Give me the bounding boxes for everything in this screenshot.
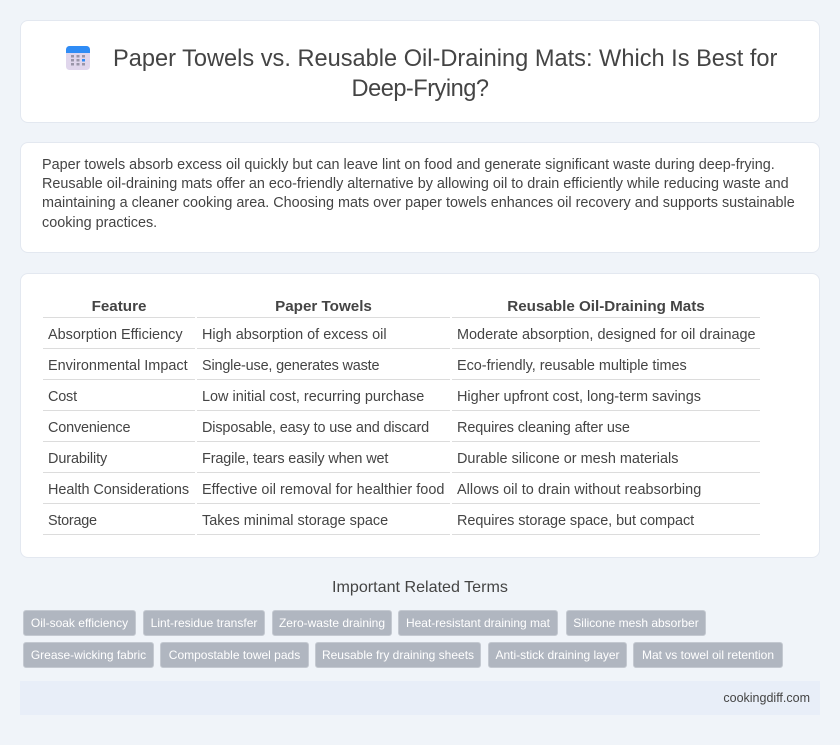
related term tags: Grease-wicking fabric xyxy=(31,648,146,662)
comparison table: Takes minimal storage space xyxy=(202,513,388,529)
row: environmental impact: Environmental Impact xyxy=(48,358,188,374)
related term tags: Silicone mesh absorber xyxy=(573,616,699,630)
related terms heading: Important Related Terms xyxy=(332,578,508,596)
table header: Feature xyxy=(92,298,146,315)
related term tags: Mat vs towel oil retention xyxy=(642,648,774,662)
comparison table: Effective oil removal for healthier food xyxy=(202,482,444,498)
intro paragraph: Paper towels absorb excess oil quickly but can leave lint on food and generate significant waste during deep-frying. xyxy=(42,156,775,172)
title xyxy=(113,46,777,102)
row: cost: Cost xyxy=(48,389,77,405)
row: durability: Durability xyxy=(48,451,107,467)
comparison table: Moderate absorption, designed for oil drainage xyxy=(457,327,756,343)
comparison table: Requires storage space, but compact xyxy=(457,513,694,529)
row: absorption efficiency: Absorption Efficiency xyxy=(48,327,183,343)
title card xyxy=(20,20,820,123)
related term tags: Anti-stick draining layer xyxy=(495,648,620,662)
icon: calendar xyxy=(66,46,90,70)
row: convenience: Convenience xyxy=(48,420,130,436)
related term tags: Heat-resistant draining mat xyxy=(406,616,550,630)
comparison table: Durable silicone or mesh materials xyxy=(457,451,678,467)
related term tags: Compostable towel pads xyxy=(169,648,300,662)
comparison table xyxy=(43,298,760,535)
intro paragraph: Reusable oil-draining mats offer an eco-friendly alternative by allowing oil to drain efficiently while reducing waste and xyxy=(42,176,789,192)
comparison table: Paper Towels xyxy=(275,298,372,315)
comparison table: Disposable, easy to use and discard xyxy=(202,420,429,436)
related term tags: Lint-residue transfer xyxy=(151,616,257,630)
comparison table: Higher upfront cost, long-term savings xyxy=(457,389,701,405)
comparison table: Low initial cost, recurring purchase xyxy=(202,389,424,405)
comparison table: High absorption of excess oil xyxy=(202,327,387,343)
intro paragraph: cooking practices. xyxy=(42,215,157,231)
footer source: cookingdiff.com xyxy=(723,691,810,705)
related term tags: Reusable fry draining sheets xyxy=(322,648,474,662)
comparison table: Fragile, tears easily when wet xyxy=(202,451,388,467)
title: Paper Towels vs. Reusable Oil-Draining Mats: Which Is Best for xyxy=(113,46,777,72)
comparison table: Single-use, generates waste xyxy=(202,358,379,374)
row: storage: Storage xyxy=(48,513,97,529)
intro paragraph: maintaining a cleaner cooking area. Choosing mats over paper towels enhances oil recovery and supports sustainable xyxy=(42,195,795,211)
comparison table: Eco-friendly, reusable multiple times xyxy=(457,358,687,374)
footer bar xyxy=(20,681,820,715)
related term tags: Oil-soak efficiency xyxy=(31,616,128,630)
comparison table: Requires cleaning after use xyxy=(457,420,630,436)
comparison table: Reusable Oil-Draining Mats xyxy=(507,298,705,315)
intro card xyxy=(20,142,820,253)
table card xyxy=(20,273,820,558)
related term tags xyxy=(23,610,783,668)
row: health considerations: Health Considerations xyxy=(48,482,189,498)
related term tags: Zero-waste draining xyxy=(279,616,385,630)
intro paragraph xyxy=(42,156,795,231)
title: Deep-Frying? xyxy=(352,76,488,102)
comparison table: Allows oil to drain without reabsorbing xyxy=(457,482,701,498)
